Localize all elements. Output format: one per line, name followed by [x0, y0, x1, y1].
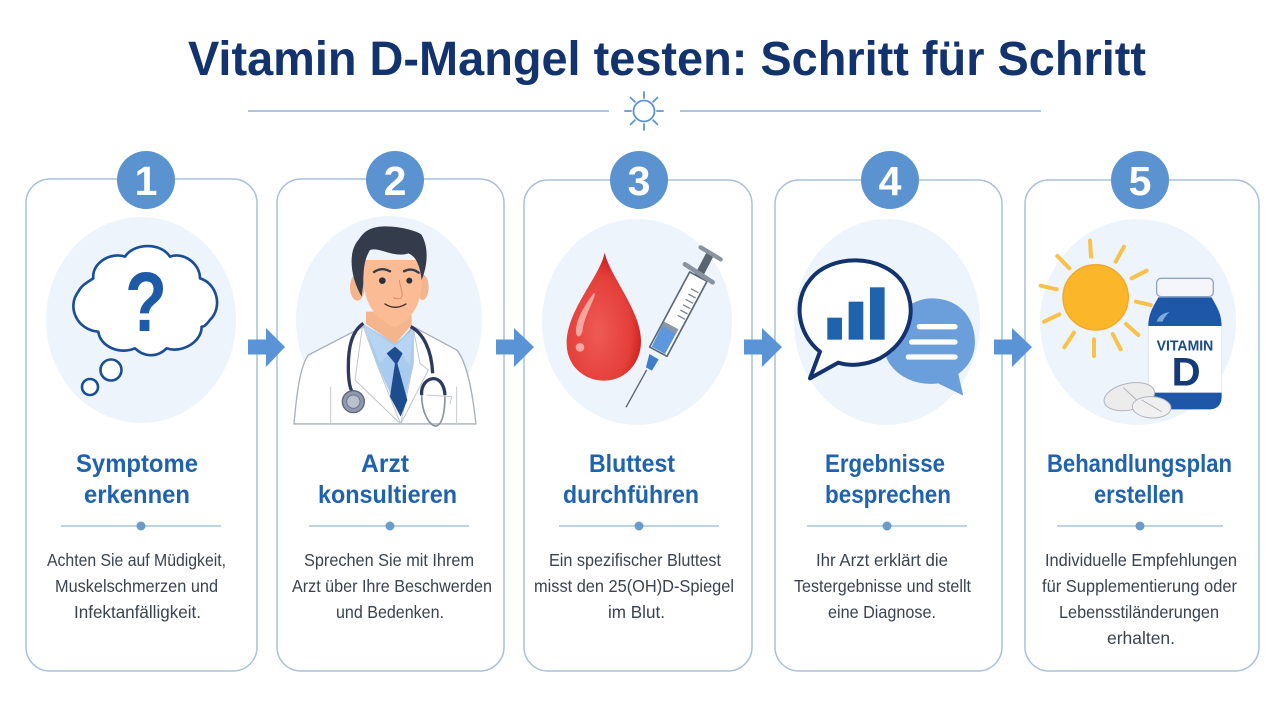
text: step 5: Individuelle Empfehlungen	[1045, 550, 1237, 570]
heading: step 4: Ergebnisse	[825, 450, 945, 478]
panel: step 5	[1025, 180, 1259, 671]
heading: step 5: Behandlungsplan	[1047, 450, 1232, 478]
text: step 5: für Supplementierung oder	[1042, 576, 1237, 596]
heading: step 2: konsultieren	[318, 481, 457, 509]
heading: step 1: erkennen	[84, 481, 190, 509]
text: step 4: Ihr Arzt erklärt die	[816, 550, 948, 570]
text: step 4: eine Diagnose.	[828, 602, 936, 622]
icon: speech bubbles with chart	[800, 260, 975, 396]
title: Vitamin D-Mangel testen: Schritt für Schritt	[188, 33, 1146, 86]
number badge 1	[117, 151, 175, 209]
panel: step 2	[277, 179, 504, 671]
number badge 5	[1111, 151, 1169, 209]
icon: sun and vitamin D bottle: D	[1172, 351, 1201, 395]
number badge 4	[861, 151, 919, 209]
arrow 4 to 5	[994, 328, 1032, 367]
icon: sun and vitamin D bottle: VITAMIN	[1157, 339, 1213, 355]
text: step 1	[47, 550, 226, 622]
text: step 3: Ein spezifischer Bluttest	[549, 550, 721, 570]
number badge 2	[366, 151, 424, 209]
icon: doctor	[294, 226, 476, 426]
arrow 1 to 2	[248, 328, 285, 367]
text: step 2: und Bedenken.	[336, 602, 444, 622]
number badge 3	[610, 151, 668, 209]
icon: header sun	[625, 92, 663, 130]
heading: step 2: Arzt	[361, 450, 410, 478]
heading: step 3	[563, 450, 699, 509]
number badge 3: 3	[628, 158, 650, 204]
text: step 4	[794, 550, 971, 622]
text: step 3: misst den 25(OH)D-Spiegel	[534, 576, 734, 596]
text: step 5: Lebensstiländerungen	[1059, 602, 1219, 622]
panel: step 3	[524, 180, 752, 671]
number badge 2: 2	[384, 158, 406, 204]
heading: step 3: Bluttest	[589, 450, 676, 478]
number badge 1: 1	[135, 158, 157, 204]
heading: step 3: durchführen	[563, 481, 699, 509]
heading: step 5	[1047, 450, 1232, 509]
heading: step 2	[318, 450, 457, 509]
panel: step 4	[775, 180, 1002, 671]
text: step 3: im Blut.	[608, 602, 665, 622]
text: step 1: Muskelschmerzen und	[55, 576, 218, 596]
text: step 5: erhalten.	[1107, 628, 1175, 648]
number badge 4: 4	[879, 158, 902, 204]
text: step 5	[1042, 550, 1237, 648]
heading: step 5: erstellen	[1094, 481, 1184, 509]
arrow 2 to 3	[496, 328, 534, 367]
icon: thought cloud with question mark	[73, 246, 217, 395]
icon: thought cloud with question mark: ?	[125, 255, 167, 349]
number badge 5: 5	[1129, 158, 1151, 204]
text: step 3	[534, 550, 734, 622]
heading: step 1	[76, 450, 198, 509]
text: step 2	[292, 550, 492, 622]
icon: sun and vitamin D bottle	[1041, 241, 1222, 419]
text: step 1: Achten Sie auf Müdigkeit,	[47, 550, 226, 570]
text: step 4: Testergebnisse und stellt	[794, 576, 971, 596]
heading: step 4: besprechen	[825, 481, 951, 509]
icon: blood drop and syringe	[567, 247, 721, 407]
text: step 2: Arzt über Ihre Beschwerden	[292, 576, 492, 596]
text: step 1: Infektanfälligkeit.	[74, 602, 201, 622]
heading: step 4	[825, 450, 951, 509]
panel: step 1	[26, 179, 257, 671]
text: step 2: Sprechen Sie mit Ihrem	[304, 550, 474, 570]
arrow 3 to 4	[744, 328, 782, 367]
heading: step 1: Symptome	[76, 450, 198, 478]
